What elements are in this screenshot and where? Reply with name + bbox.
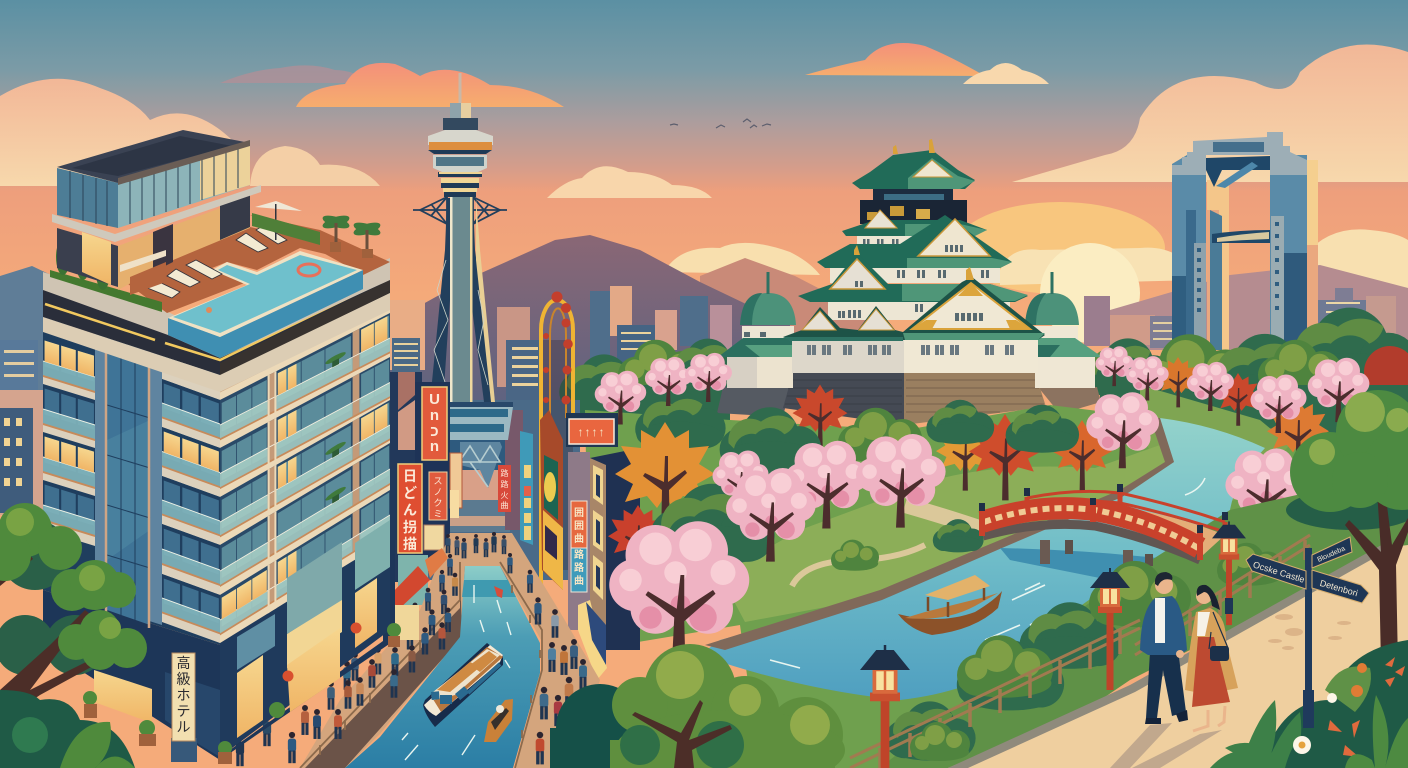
river xyxy=(700,418,1265,700)
sign: top direction xyxy=(1312,537,1352,568)
autumn trees xyxy=(792,357,1329,500)
background tree line xyxy=(559,308,1408,455)
cloud: low centre xyxy=(664,243,820,275)
front park trees over street buildings xyxy=(608,422,816,668)
hotel: penthouse glass xyxy=(57,145,250,228)
castle: main roof and gables xyxy=(783,245,1045,341)
street backdrop: Dotonbori xyxy=(400,400,580,580)
cloud: small cream right xyxy=(963,63,1049,84)
sign: small orange: ス xyxy=(433,476,443,486)
cloud: left small xyxy=(250,146,380,186)
skyline: left xyxy=(0,340,44,515)
cloud: near sun xyxy=(1000,248,1200,285)
sign: small red centre: 火 xyxy=(500,491,508,500)
hotel: right face floors xyxy=(220,268,390,643)
hotel: potted plants xyxy=(83,623,401,764)
sign: orange vertical 1: U xyxy=(429,391,440,408)
right foreground tree xyxy=(1286,390,1408,665)
canal highlights xyxy=(402,585,511,760)
crowd on walkways xyxy=(236,532,587,766)
birds xyxy=(670,119,771,128)
left foreground tree xyxy=(0,503,147,722)
castle: white wall xyxy=(792,338,1038,373)
green mid trees xyxy=(635,391,1079,571)
river shadow under bridge xyxy=(1000,548,1176,582)
hotel: ground floor windows xyxy=(94,520,390,757)
right bank land xyxy=(880,470,1408,768)
hotel: umbrella xyxy=(255,201,302,240)
tower legs xyxy=(430,198,452,402)
sign: small red centre: 路 xyxy=(500,469,508,478)
sign: vertical orange and blue: 囲 xyxy=(574,520,584,532)
sign: red main: 描 xyxy=(403,536,417,552)
Osaka Castle xyxy=(717,139,1102,425)
buildings: left of street xyxy=(390,372,462,605)
tower arms xyxy=(413,197,507,224)
castle: left dome tower xyxy=(718,272,796,388)
sign: small red centre xyxy=(498,465,511,512)
canal walkways xyxy=(300,533,600,768)
neon ferris arch xyxy=(540,292,573,590)
river highlights xyxy=(770,478,1205,668)
skyline: centre xyxy=(390,286,732,410)
river bank xyxy=(705,418,1174,650)
sign: small orange: ノ xyxy=(433,487,443,497)
sign: orange vertical 1: n xyxy=(430,438,439,455)
sign: orange vertical 1 xyxy=(422,387,447,460)
hotel vertical sign: テ xyxy=(176,703,190,719)
bottom right foliage xyxy=(1210,640,1408,768)
hotel: rooftop hedge and cypress xyxy=(50,213,320,312)
red awning xyxy=(390,548,448,640)
hotel: roof deck xyxy=(43,215,390,358)
building: purple block xyxy=(568,452,590,630)
lanterns xyxy=(860,521,1246,768)
sign: red main: ん xyxy=(403,502,417,518)
small red boat far xyxy=(494,586,503,598)
sign: Dotonbori: Detenbori xyxy=(1319,578,1359,598)
bottom left foliage xyxy=(0,690,135,768)
fence xyxy=(850,535,1310,768)
sign: red main: 拐 xyxy=(403,519,417,535)
red bridge xyxy=(979,484,1228,576)
front lantern bush xyxy=(910,722,970,761)
skyline: right xyxy=(1084,288,1396,348)
hotel: glass column xyxy=(95,330,162,628)
building: tan right of street xyxy=(578,448,640,680)
hotel: left outer floors xyxy=(43,336,95,546)
park land xyxy=(585,405,1408,768)
sand path xyxy=(948,545,1408,768)
signpost xyxy=(1246,537,1369,728)
castle: tier 4 xyxy=(842,210,987,248)
hotel xyxy=(43,130,401,764)
sign: top banner xyxy=(566,413,618,447)
hotel: left face base xyxy=(43,317,220,645)
hotel: sun loungers xyxy=(145,225,287,298)
cloud: left large xyxy=(0,79,232,186)
tour boat xyxy=(423,643,503,727)
sign: Dotonbori xyxy=(1312,570,1369,603)
hotel vertical sign: 高 xyxy=(176,655,190,671)
sign: blue with yellow panels xyxy=(520,431,533,545)
sign: vertical orange and blue: 曲 xyxy=(574,532,584,545)
sign: Osaka Castle: Ocske Castle xyxy=(1252,560,1306,585)
castle: tier 2 xyxy=(798,253,1028,320)
lower centre tree xyxy=(550,644,845,768)
sign: red main xyxy=(398,464,422,553)
sign: vertical orange and blue: 曲 xyxy=(574,574,584,587)
sun glow xyxy=(955,202,1165,294)
Tsutenkaku tower xyxy=(413,73,513,488)
hotel: palms xyxy=(321,213,382,258)
sign: vertical orange and blue xyxy=(571,501,587,592)
cloud: top orange xyxy=(296,63,564,107)
path stepping marks xyxy=(1268,614,1351,650)
cloud: lower right cream xyxy=(1300,229,1408,300)
hotel: roof overhang xyxy=(52,185,261,242)
canal water xyxy=(345,566,540,768)
far bank strip xyxy=(1140,385,1290,520)
castle: top tier xyxy=(852,139,975,224)
hotel: fascia and light strip xyxy=(43,263,390,392)
sign: Osaka Castle xyxy=(1246,554,1306,589)
hotel: front left bay floors xyxy=(162,331,220,643)
sign: small orange: ミ xyxy=(433,509,443,519)
path curb xyxy=(948,543,1392,768)
hotel vertical sign: ホ xyxy=(176,687,190,703)
sign: vertical orange and blue: 路 xyxy=(574,561,584,574)
castle: tier 3 xyxy=(817,215,1012,283)
canal railings xyxy=(300,562,542,768)
sign: small red centre: 曲 xyxy=(500,500,508,510)
sign: small red centre: 路 xyxy=(500,479,508,489)
sign: red main: 日 xyxy=(403,468,417,484)
couple walking xyxy=(1140,572,1238,731)
castle: stone base xyxy=(717,372,1101,425)
sign: top direction: Bloudeba xyxy=(1316,545,1346,564)
woman xyxy=(1185,585,1238,731)
small wooden boat xyxy=(484,699,513,742)
hotel: flat roof xyxy=(57,130,250,185)
Umeda Sky Building xyxy=(1172,132,1318,350)
bank hedges xyxy=(885,543,1283,761)
sign: top banner: ↑↑↑↑ xyxy=(578,425,606,439)
neon signs xyxy=(398,292,618,630)
hotel vertical sign: 級 xyxy=(176,671,190,687)
cloud: top right orange xyxy=(805,43,985,76)
hotel: penthouse lower level xyxy=(57,195,250,295)
sign: vertical orange and blue: 囲 xyxy=(574,508,584,519)
mountains xyxy=(0,235,1408,420)
couple shadows xyxy=(1110,723,1222,768)
canal stripe xyxy=(462,580,516,597)
boat on river xyxy=(898,575,1002,635)
lawn xyxy=(720,445,1172,622)
man xyxy=(1140,572,1188,724)
hotel: paper lanterns xyxy=(282,622,362,682)
sign: small orange: ク xyxy=(433,498,443,508)
castle: right dome tower xyxy=(1025,272,1102,388)
hotel vertical sign xyxy=(171,653,197,762)
sign: vertical orange and blue: 路 xyxy=(574,548,584,561)
sign: red main: ど xyxy=(403,485,417,501)
cloud: mauve strip xyxy=(220,65,368,83)
cloud: right large xyxy=(1012,44,1408,182)
sign: orange vertical 1: כ xyxy=(430,423,439,440)
park paths xyxy=(792,505,985,586)
cherry blossom trees xyxy=(595,346,1369,533)
hotel: podium xyxy=(83,540,395,760)
sign: small orange xyxy=(429,472,447,520)
sign: orange vertical 1: n xyxy=(430,407,439,424)
sun xyxy=(1040,243,1140,343)
hotel vertical sign: ル xyxy=(176,719,190,735)
cloud: centre cream xyxy=(547,166,712,198)
hotel: pool xyxy=(168,251,363,358)
